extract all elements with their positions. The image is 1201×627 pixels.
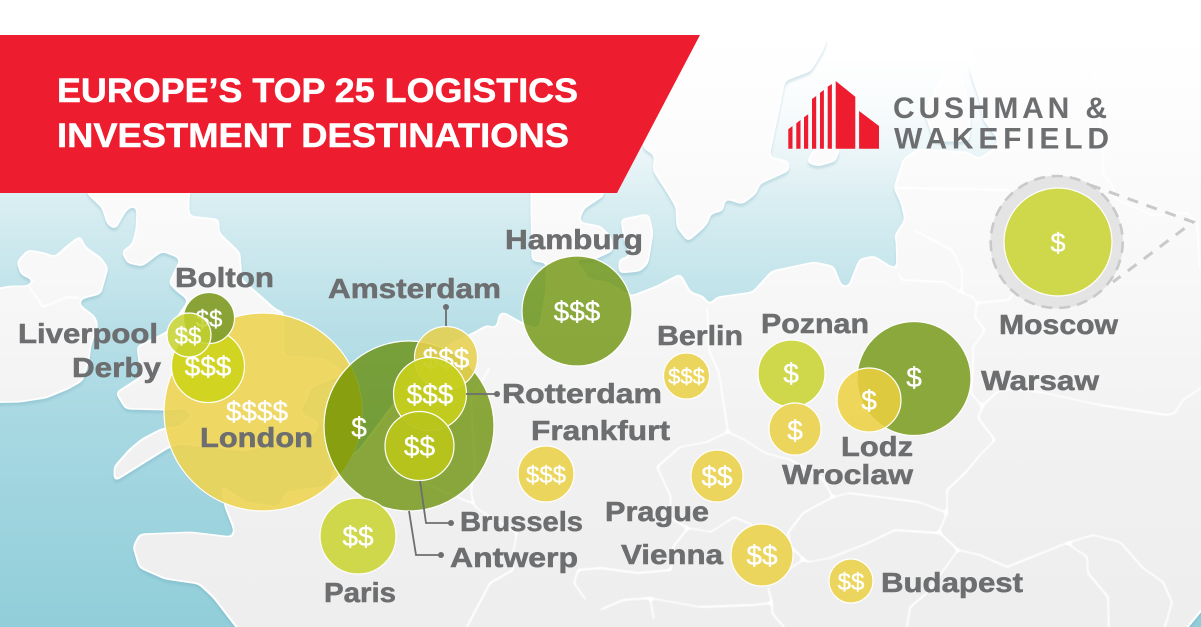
city label: Poznan: Poznan bbox=[761, 308, 869, 339]
bubble: Vienna: $$ bbox=[746, 540, 778, 571]
city label: Antwerp: Antwerp bbox=[450, 542, 578, 573]
title: INVESTMENT DESTINATIONS bbox=[57, 117, 569, 155]
bubble: Frankfurt: $$$ bbox=[526, 462, 566, 489]
city label: Derby: Derby bbox=[72, 352, 161, 383]
title: EUROPE’S TOP 25 LOGISTICS bbox=[57, 72, 578, 110]
city label: London: London bbox=[200, 422, 313, 453]
logo icon: building bars bbox=[788, 81, 879, 149]
bubble: Budapest: $$ bbox=[838, 569, 864, 596]
inset: Moscow dashed callout: $ bbox=[1050, 228, 1066, 258]
bubble: London bbox=[164, 313, 362, 511]
city label: Berlin: Berlin bbox=[657, 320, 743, 351]
bubble: Hamburg: $$$ bbox=[554, 296, 601, 327]
city label: Brussels: Brussels bbox=[460, 506, 583, 537]
land: Great Britain bbox=[88, 180, 344, 480]
bubble: Brussels: $$ bbox=[404, 431, 435, 462]
title banner bbox=[0, 35, 700, 193]
city label: Lodz: Lodz bbox=[841, 431, 913, 462]
city label: Wroclaw: Wroclaw bbox=[782, 459, 913, 490]
land: Finland bbox=[925, 67, 970, 140]
title bbox=[57, 72, 578, 155]
bubble: Frankfurt bbox=[518, 446, 574, 502]
logo: Cushman & Wakefield bbox=[788, 81, 1109, 156]
bubble: Prague bbox=[691, 450, 743, 502]
city label: Budapest: Budapest bbox=[881, 567, 1023, 598]
land: Zealand island bbox=[620, 215, 652, 272]
bubble: London: $$$$ bbox=[226, 396, 289, 427]
city label: Prague: Prague bbox=[605, 496, 709, 527]
city label: Rotterdam: Rotterdam bbox=[502, 378, 662, 409]
city label: Hamburg: Hamburg bbox=[505, 224, 643, 255]
logo wordmark: WAKEFIELD bbox=[894, 123, 1109, 156]
bubble: Warsaw bbox=[857, 322, 971, 436]
bubble: Derby bbox=[172, 330, 244, 402]
bubble: Wroclaw: $ bbox=[787, 415, 803, 446]
bubble: Vienna bbox=[731, 524, 793, 586]
bubble: Bolton: $$ bbox=[196, 306, 222, 333]
bubble: Amsterdam: $$$ bbox=[423, 343, 470, 374]
bubble: Rotterdam bbox=[394, 358, 466, 430]
bubble: large green Antwerp: $ bbox=[351, 412, 367, 443]
logo wordmark: CUSHMAN & bbox=[893, 92, 1107, 125]
bubble: Liverpool: $$ bbox=[175, 323, 201, 350]
bubble: Wroclaw bbox=[769, 403, 821, 455]
bubble: Rotterdam: $$$ bbox=[407, 379, 454, 410]
bubble: Berlin bbox=[664, 353, 710, 399]
bubble: Budapest bbox=[829, 559, 873, 603]
bubble: Poznan bbox=[758, 340, 825, 407]
leader: Brussels bbox=[420, 481, 454, 526]
bubble: Hamburg bbox=[522, 256, 632, 366]
bubble: large green Antwerp bbox=[324, 341, 494, 511]
land: Gotland island bbox=[808, 148, 839, 165]
inset: Moscow dashed callout bbox=[990, 176, 1193, 308]
land: Ireland bbox=[0, 237, 107, 402]
bubble: Paris bbox=[320, 498, 396, 574]
bubble: Lodz: $ bbox=[861, 385, 877, 416]
bubble: Poznan: $ bbox=[783, 358, 799, 389]
bubble: Paris: $$ bbox=[342, 521, 374, 552]
leader: Amsterdam bbox=[443, 304, 449, 326]
city label: Moscow: Moscow bbox=[999, 309, 1118, 340]
city label: Warsaw: Warsaw bbox=[981, 365, 1099, 396]
bubble: Amsterdam bbox=[414, 326, 478, 390]
city label: Paris: Paris bbox=[324, 577, 396, 608]
city label: Vienna: Vienna bbox=[621, 539, 723, 570]
logo wordmark bbox=[893, 92, 1109, 156]
bubble: Lodz bbox=[837, 368, 901, 432]
bubble: Berlin: $$$ bbox=[668, 364, 705, 389]
bubble: Bolton bbox=[184, 292, 234, 344]
city label: Bolton: Bolton bbox=[175, 262, 274, 293]
city label: Amsterdam: Amsterdam bbox=[328, 273, 501, 304]
bubble: Warsaw: $ bbox=[906, 362, 922, 393]
city label: Frankfurt: Frankfurt bbox=[531, 415, 670, 446]
land: Scandinavia bbox=[644, 38, 826, 240]
leader: Antwerp bbox=[409, 511, 444, 558]
bubble: Brussels bbox=[385, 412, 454, 480]
leader: Rotterdam bbox=[466, 391, 500, 397]
city label: Liverpool: Liverpool bbox=[18, 318, 158, 349]
bubble: Liverpool bbox=[167, 313, 211, 357]
bubble: Derby: $$$ bbox=[185, 351, 232, 382]
bubble: Prague: $$ bbox=[701, 461, 733, 492]
